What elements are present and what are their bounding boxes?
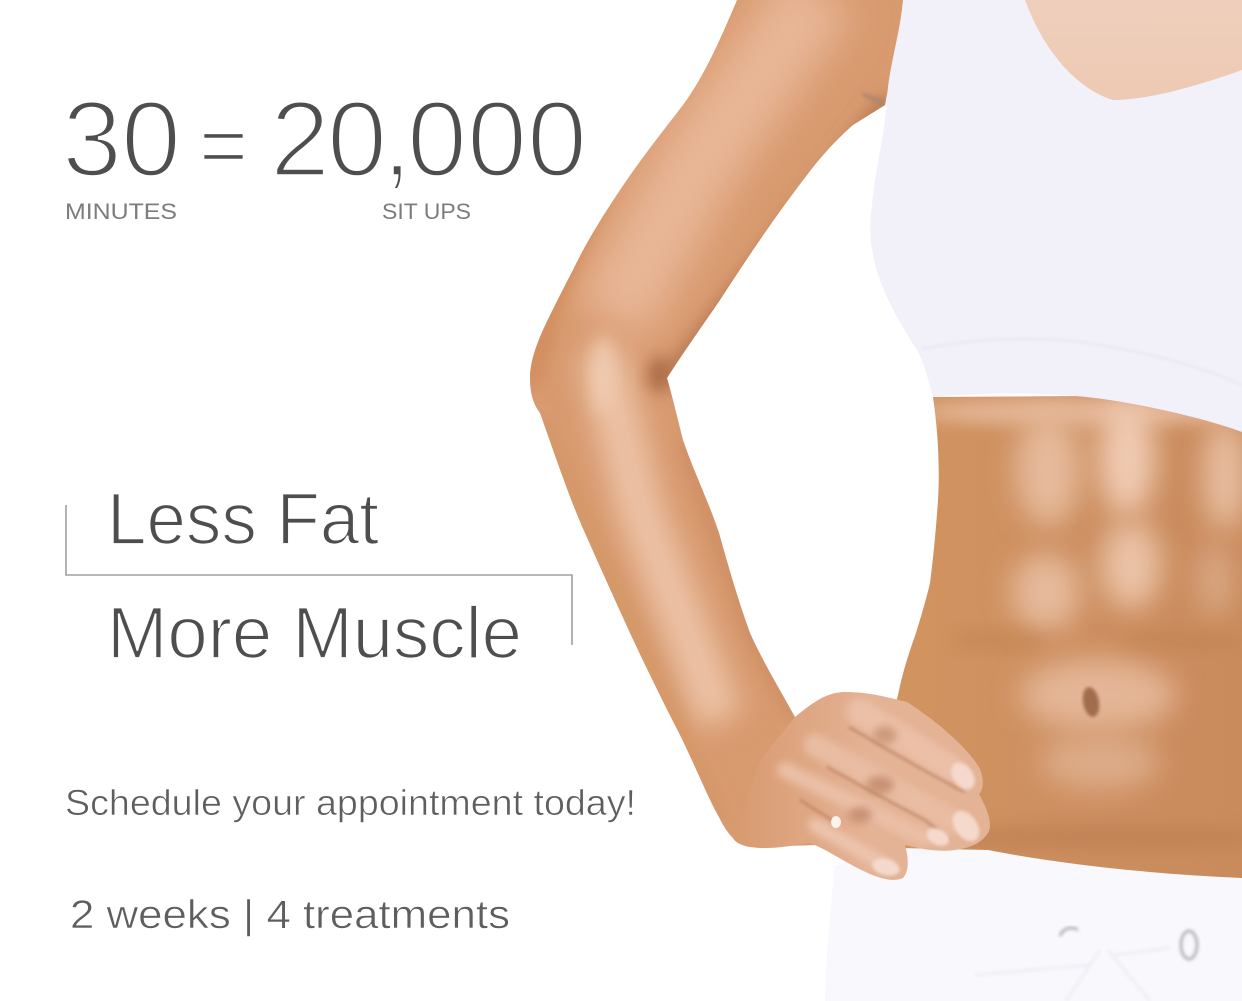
bra band line xyxy=(922,339,1242,385)
knuckle creases xyxy=(800,727,965,840)
abdomen xyxy=(880,395,1242,900)
bracket divider xyxy=(66,505,572,645)
heading: more muscle: More Muscle xyxy=(107,593,522,674)
arm xyxy=(530,0,905,847)
label: minutes: MINUTES xyxy=(65,199,177,224)
photo: torso with hand on hip xyxy=(530,0,1242,1001)
pants xyxy=(825,848,1242,1001)
headline equation: = xyxy=(199,98,248,192)
finger highlights xyxy=(785,712,955,865)
call to action: Schedule your appointment today! xyxy=(65,782,636,823)
headline equation: 20,000 xyxy=(250,78,587,199)
heading: less fat: Less Fat xyxy=(107,479,379,560)
headline equation: 30 xyxy=(62,78,210,199)
hand xyxy=(733,692,990,880)
navel xyxy=(1081,686,1101,718)
bra xyxy=(870,0,1242,432)
pants drawstring and eyelets xyxy=(975,928,1197,1001)
ring xyxy=(831,816,841,828)
upper chest skin xyxy=(1015,0,1242,110)
treatment schedule: 2 weeks | 4 treatments xyxy=(70,893,510,937)
fingernails xyxy=(870,758,985,878)
armpit shadow xyxy=(862,92,885,106)
label: sit ups: SIT UPS xyxy=(382,199,471,224)
